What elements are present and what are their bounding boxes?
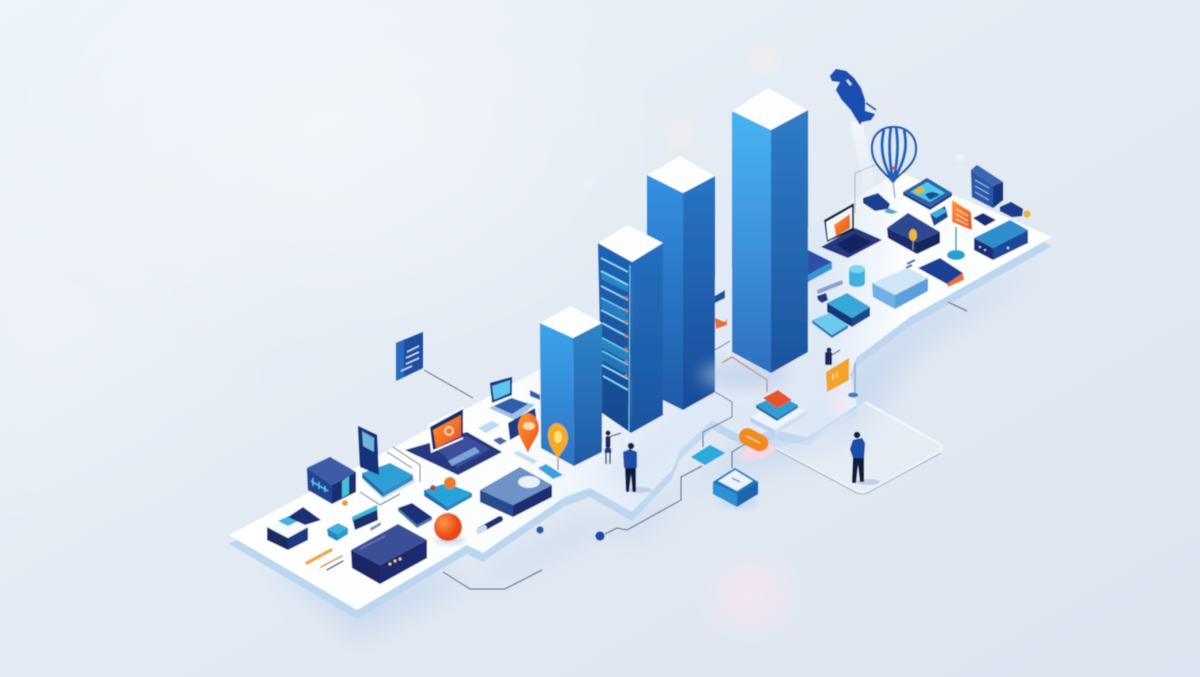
small monitor device	[352, 505, 381, 531]
flat blue box	[480, 467, 552, 517]
small router	[478, 408, 537, 445]
orange pill	[736, 425, 777, 463]
cyan pad	[691, 445, 725, 465]
navy notebook	[918, 258, 964, 287]
yellow pin	[548, 423, 568, 470]
navy slab box behind tower	[808, 250, 832, 282]
node near platform edge	[536, 526, 544, 534]
floating document panel	[396, 332, 423, 381]
blue stacked box	[713, 468, 758, 509]
small device behind bars	[715, 290, 727, 329]
orange pin	[518, 413, 539, 453]
artwork	[229, 69, 1052, 619]
mini stacked platform	[750, 390, 807, 435]
teal tablet device	[903, 178, 952, 210]
teal base with upright phone	[358, 426, 415, 499]
red wire	[722, 357, 767, 392]
small teal device	[930, 206, 948, 226]
teal hub with orange top	[424, 477, 472, 511]
platform	[229, 172, 1052, 619]
navy card	[288, 507, 321, 525]
small wires on slab	[906, 260, 915, 268]
white box with cyan top	[267, 515, 308, 550]
dark cube	[307, 457, 356, 506]
bar 4	[700, 88, 808, 389]
bar 2: server tower	[598, 225, 663, 433]
wire outline stroke	[775, 402, 942, 493]
bar 3	[647, 156, 715, 410]
wire outline loop	[775, 402, 942, 493]
person: man with blue shirt	[623, 443, 652, 493]
flat phone	[398, 503, 432, 528]
server cabinet	[971, 165, 1003, 208]
slim light strip	[513, 451, 538, 464]
platform shadow	[270, 262, 1050, 640]
dark teal box	[827, 293, 870, 327]
orange strips	[307, 550, 343, 570]
right laptop	[821, 203, 882, 258]
bar 1	[540, 306, 602, 466]
orange sign panel	[826, 358, 858, 427]
blue pad	[538, 464, 563, 479]
light blue box	[872, 268, 928, 309]
server slots	[601, 258, 628, 390]
small laptop	[489, 377, 540, 420]
person: upper small	[825, 348, 840, 365]
map blob	[830, 69, 878, 205]
small cyan box	[327, 523, 348, 541]
big router	[351, 524, 427, 584]
cyan cylinder	[849, 265, 865, 287]
hot air balloon	[872, 127, 916, 198]
usb stick	[479, 519, 500, 531]
big laptop	[405, 407, 502, 475]
large teal box	[974, 220, 1028, 260]
orange sign on stem	[947, 200, 972, 260]
hub dark box	[887, 213, 940, 254]
cyan tablet	[812, 313, 848, 338]
small dark router	[1000, 202, 1030, 218]
person: standing right	[850, 432, 880, 485]
wire outline shade	[775, 449, 941, 494]
wire end node	[596, 532, 604, 540]
small navy tile	[973, 213, 996, 226]
strip and node	[817, 280, 843, 303]
lamp router	[863, 193, 898, 214]
orange ball	[434, 513, 465, 544]
person: small woman	[604, 430, 621, 464]
connector wires	[360, 165, 967, 589]
